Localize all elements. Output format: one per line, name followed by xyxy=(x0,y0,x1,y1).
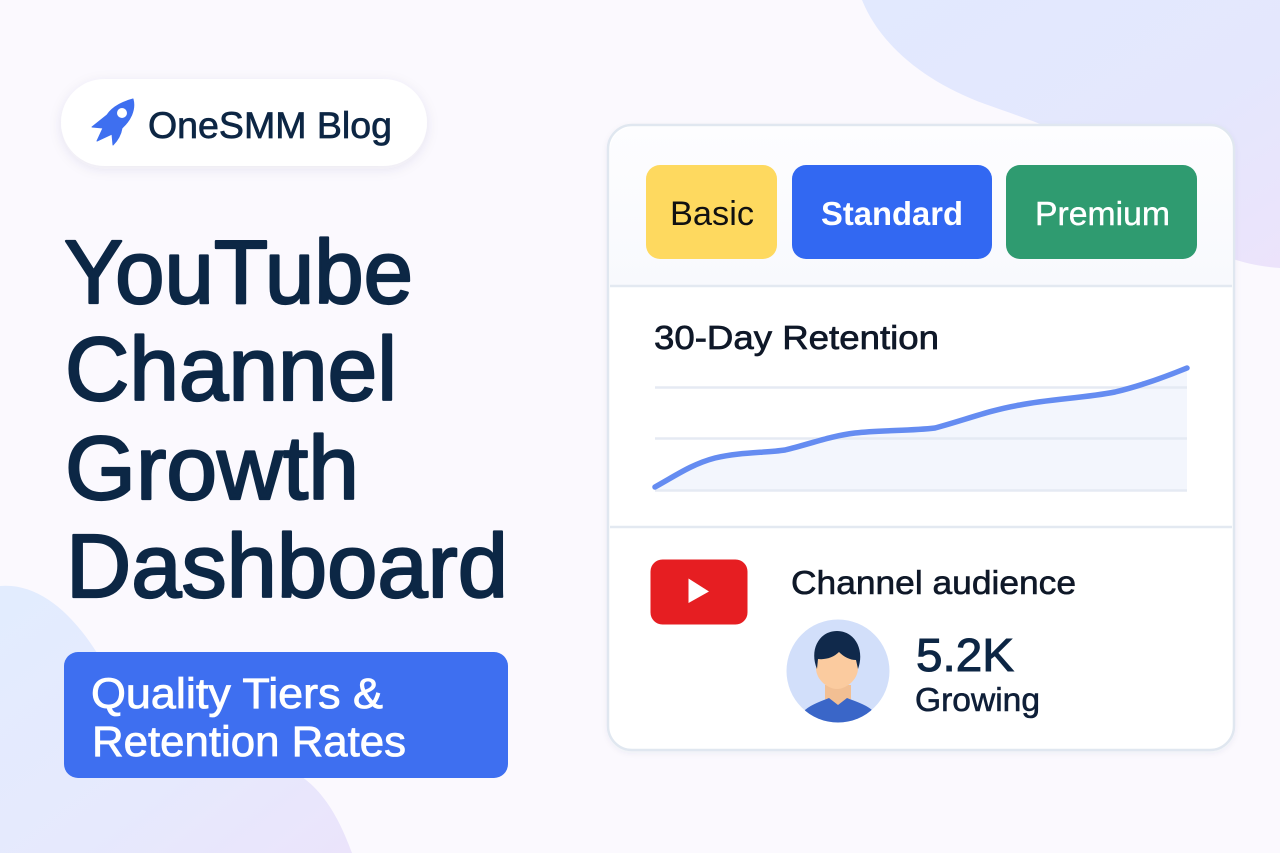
logo pill xyxy=(61,79,427,166)
subtitle text: Retention Rates xyxy=(92,718,406,766)
audience count: 5.2K xyxy=(916,629,1014,681)
title xyxy=(64,223,508,617)
tier: Premium xyxy=(1006,165,1197,259)
tier: Premium: Premium xyxy=(1035,195,1170,232)
title: Channel xyxy=(65,320,397,420)
panel: retention chart xyxy=(654,319,1187,491)
tier: Standard: Standard xyxy=(821,195,963,232)
subtitle text xyxy=(91,670,406,766)
tier: Basic: Basic xyxy=(670,195,754,233)
subtitle text: Quality Tiers & xyxy=(91,670,383,718)
chart heading: 30-Day Retention xyxy=(654,319,939,356)
tier: Basic xyxy=(646,165,777,259)
title: Growth xyxy=(65,419,359,519)
audience status: Growing xyxy=(915,681,1040,718)
dashboard card xyxy=(608,125,1234,750)
panel: quality tiers xyxy=(610,127,1232,285)
line chart xyxy=(655,368,1187,491)
icon: YouTube play button xyxy=(650,560,748,624)
logo text: OneSMM Blog xyxy=(148,105,392,146)
panel: channel audience xyxy=(650,560,1076,730)
background blob: bottom left xyxy=(0,586,352,853)
icon: avatar xyxy=(786,620,890,730)
audience heading: Channel audience xyxy=(791,564,1076,601)
title: Dashboard xyxy=(66,517,508,617)
icon: rocket xyxy=(92,99,134,145)
subtitle badge xyxy=(64,652,508,778)
title: YouTube xyxy=(64,223,413,323)
background blob: top right xyxy=(862,0,1280,268)
tier: Standard xyxy=(792,165,992,259)
